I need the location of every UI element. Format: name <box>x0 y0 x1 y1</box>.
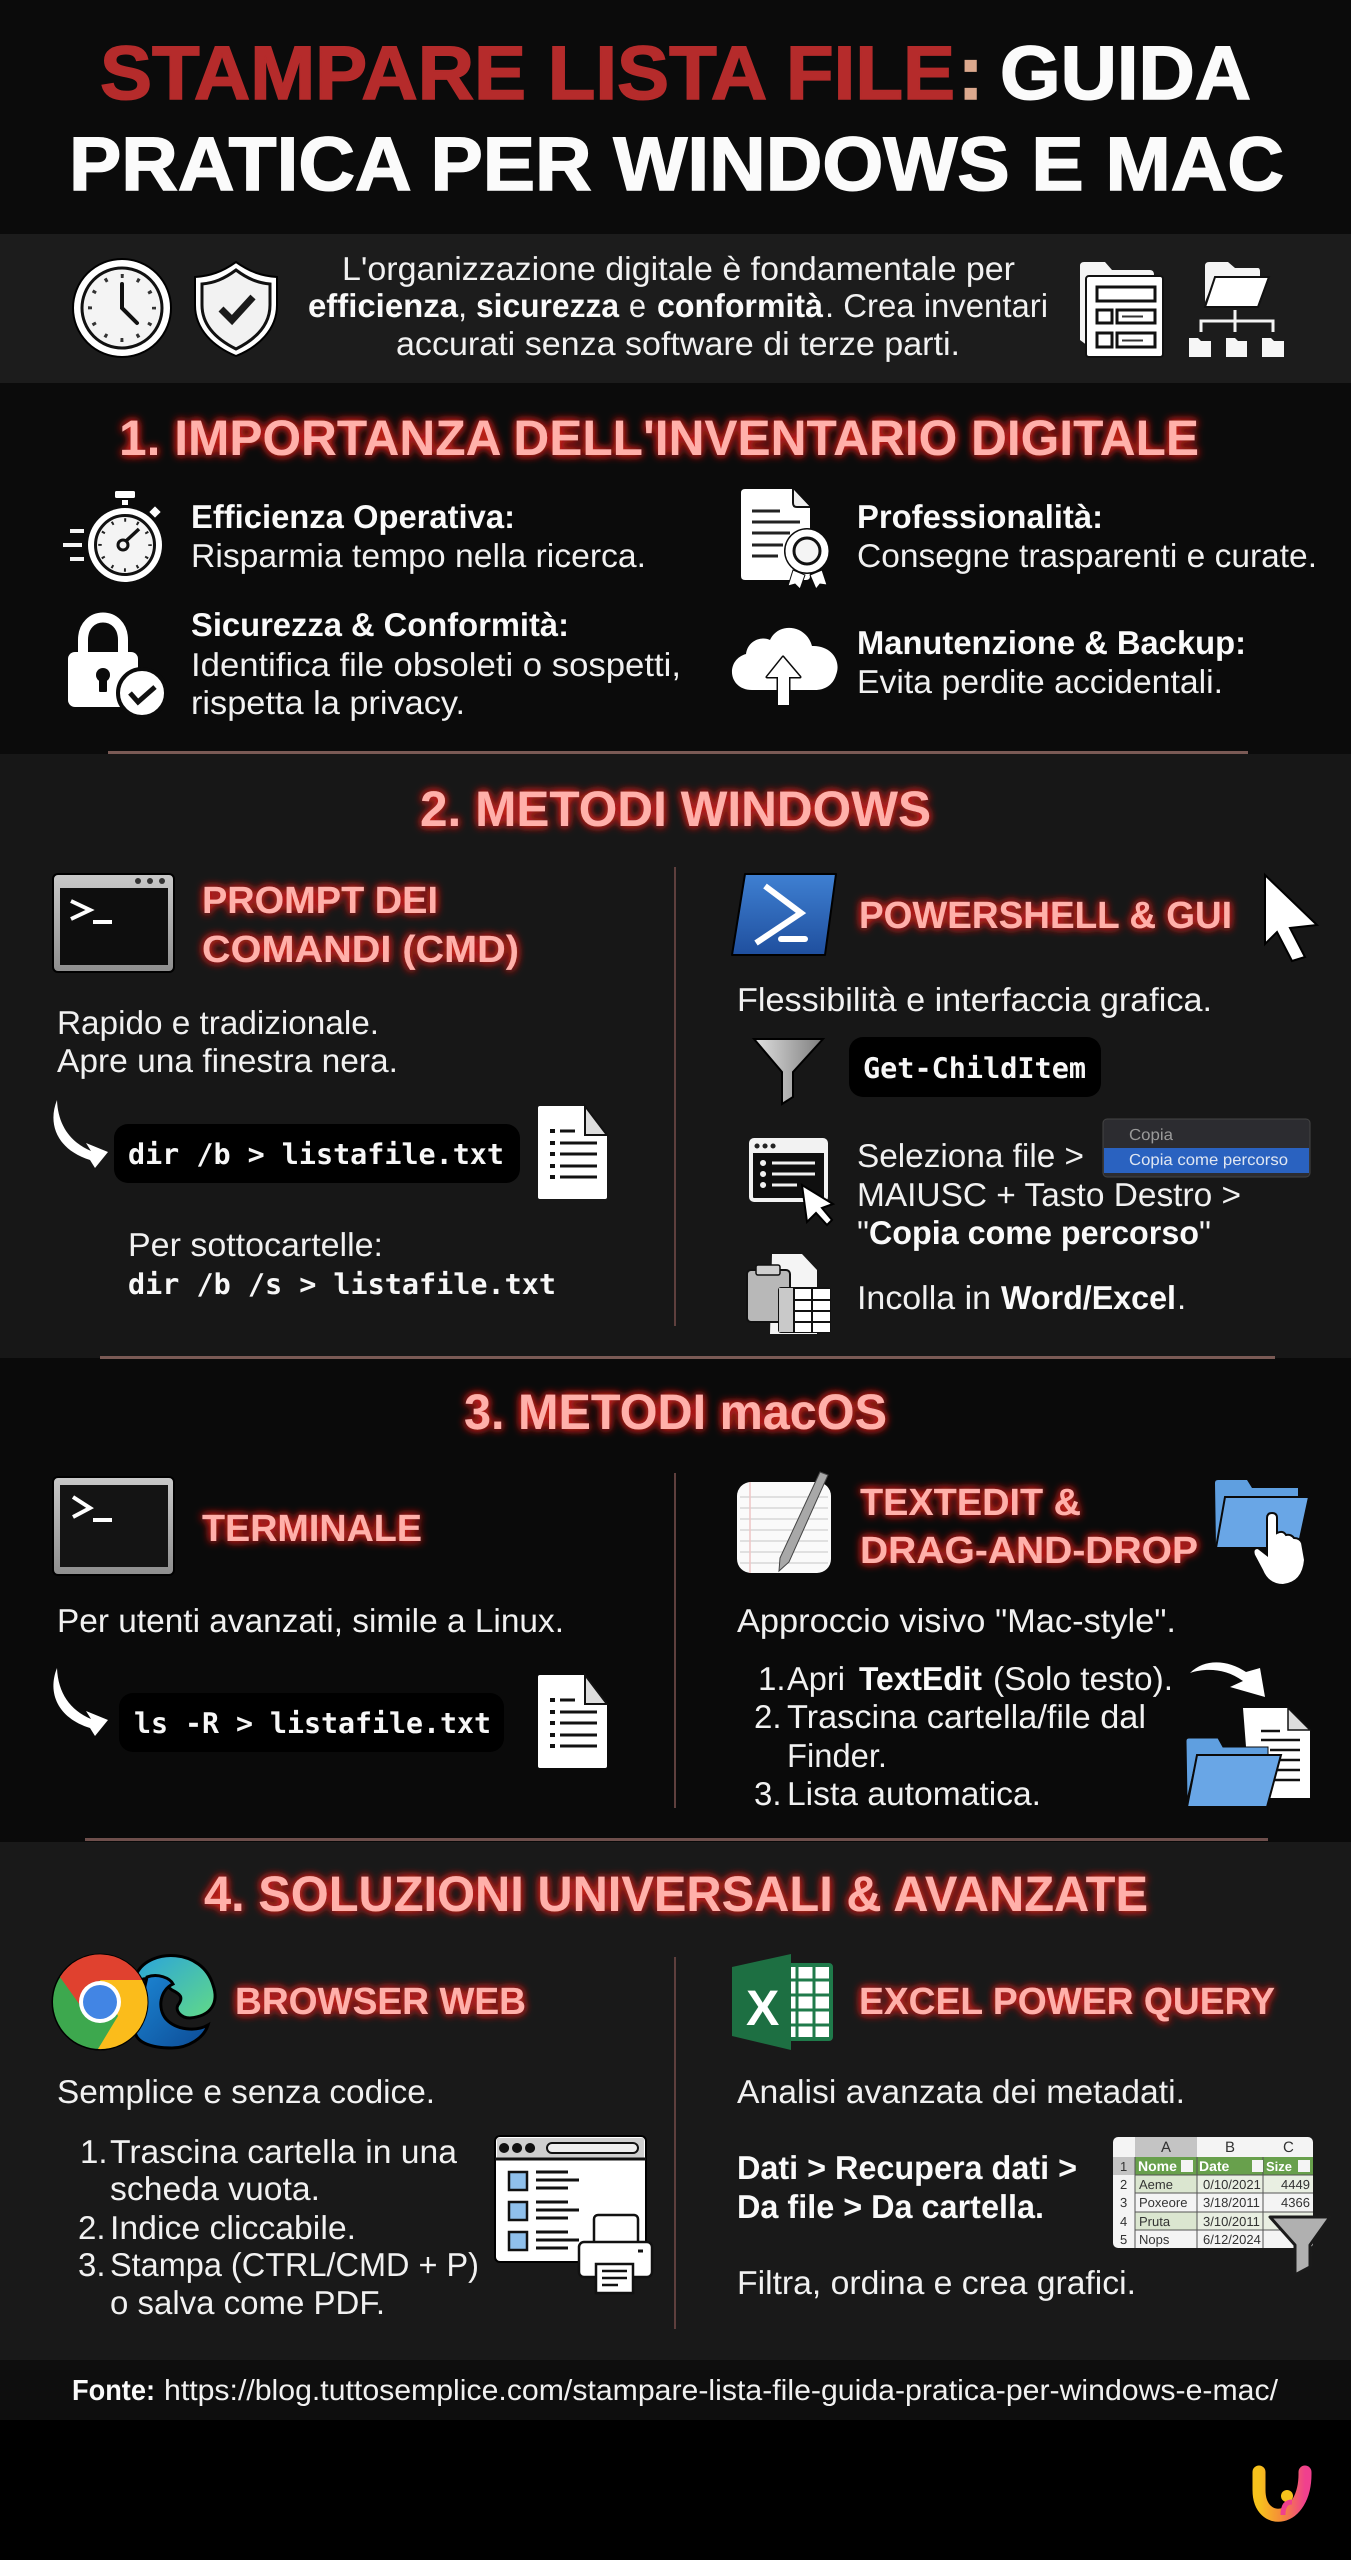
panel: footer source: https://blog.tuttosemplice.com/stampare-lista-file-guida-pratica-per-windows-e-mac/ <box>164 2375 1279 2407</box>
item: sicurezza e conformita: Sicurezza & Conformità: <box>191 606 569 643</box>
column: powershell and gui <box>732 874 1317 1334</box>
intro text: . Crea inventari <box>825 287 1048 324</box>
spreadsheet: A <box>1161 2139 1171 2156</box>
spreadsheet: 5 <box>1120 2232 1127 2247</box>
icon: text document <box>538 1675 607 1768</box>
title: PRATICA PER WINDOWS E MAC <box>69 122 1284 207</box>
subfolder command <box>128 1226 556 1301</box>
code block: get-childitem <box>849 1037 1101 1097</box>
paste instruction <box>857 1279 1186 1316</box>
numbered steps: Finder. <box>787 1737 887 1774</box>
item: professionalita: Professionalità: <box>857 498 1103 535</box>
column: textedit and drag-and-drop <box>737 1472 1310 1812</box>
code block: ls: ls -R > listafile.txt <box>134 1707 491 1740</box>
spreadsheet: Pruta <box>1139 2214 1171 2229</box>
icon: certificate document <box>741 489 830 589</box>
spreadsheet: Date <box>1199 2158 1230 2174</box>
icon: terminal <box>53 1477 174 1575</box>
icon: mouse cursor <box>1265 875 1317 961</box>
spreadsheet: 2 <box>1120 2177 1127 2192</box>
numbered steps: 1. <box>758 1660 786 1697</box>
item: manutenzione e backup <box>732 624 1246 705</box>
subheading: browser web: BROWSER WEB <box>235 1981 526 2023</box>
intro text: e <box>629 287 646 324</box>
icon: folder with hand <box>1215 1480 1309 1585</box>
numbered steps: 2. <box>78 2209 106 2246</box>
subheading: prompt dei comandi <box>202 880 519 971</box>
numbered steps: Apri <box>787 1660 845 1697</box>
spreadsheet: C <box>1283 2139 1294 2156</box>
panel: section 1 importance <box>0 383 1351 754</box>
icon: clipboard with table <box>747 1254 831 1334</box>
context menu <box>1103 1119 1310 1177</box>
subheading: prompt dei comandi: COMANDI (CMD) <box>202 929 519 971</box>
spreadsheet: 0/10/2021 <box>1203 2177 1261 2192</box>
subheading: textedit and drag-and-drop <box>860 1482 1198 1572</box>
panel: section 3 macos <box>0 1356 1351 1842</box>
item: efficienza operativa: Efficienza Operativa: <box>191 498 515 535</box>
description <box>57 1004 398 1079</box>
subheading: terminale: TERMINALE <box>202 1508 422 1550</box>
logo <box>1259 2472 1305 2515</box>
icon: folder with form <box>1080 262 1163 357</box>
arrow <box>53 1668 108 1736</box>
description: Per utenti avanzati, simile a Linux. <box>57 1602 564 1639</box>
item: professionalita <box>741 489 1317 589</box>
icon: excel: X <box>746 1980 779 2036</box>
arrow <box>53 1100 108 1168</box>
instructions: " <box>857 1214 869 1251</box>
spreadsheet: 6/12/2024 <box>1203 2232 1261 2247</box>
heading: section 2: 2. METODI WINDOWS <box>420 781 931 837</box>
intro text: , <box>458 287 467 324</box>
icon: lock with check <box>68 618 166 717</box>
icon: document with folder <box>1186 1708 1310 1807</box>
icon: stopwatch <box>63 491 162 582</box>
instructions: Copia come percorso <box>869 1214 1199 1251</box>
numbered steps: 3. <box>754 1775 782 1812</box>
icon: cmd window <box>53 874 174 972</box>
subheading: powershell: POWERSHELL & GUI <box>859 895 1232 937</box>
navigation path: Dati > Recupera dati > <box>737 2149 1077 2186</box>
spreadsheet: 3/10/2011 <box>1203 2214 1260 2229</box>
heading: section 3: 3. METODI macOS <box>464 1384 887 1440</box>
instructions <box>857 1137 1241 1251</box>
instructions: Seleziona file > <box>857 1137 1084 1174</box>
numbered steps: o salva come PDF. <box>110 2284 385 2321</box>
column: prompt dei comandi <box>53 874 607 1301</box>
description: Apre una finestra nera. <box>57 1042 398 1079</box>
item: efficienza operativa: Risparmia tempo nella ricerca. <box>191 537 646 574</box>
spreadsheet: Nops <box>1139 2232 1170 2247</box>
intro text <box>308 250 1048 362</box>
panel: intro band <box>0 234 1351 383</box>
numbered steps <box>754 1660 1173 1812</box>
spreadsheet: Size <box>1266 2159 1292 2174</box>
title: STAMPARE LISTA FILE <box>100 31 955 116</box>
icon: excel <box>732 1954 831 2050</box>
title: : <box>958 31 983 116</box>
spreadsheet <box>1113 2137 1330 2275</box>
icon: textedit <box>737 1472 831 1573</box>
heading: section 1: 1. IMPORTANZA DELL'INVENTARIO DIGITALE <box>119 410 1199 466</box>
subheading: textedit and drag-and-drop: DRAG-AND-DROP <box>860 1530 1198 1572</box>
intro text: accurati senza software di terze parti. <box>396 325 960 362</box>
column: browser web <box>52 1954 652 2321</box>
description: Semplice e senza codice. <box>57 2073 435 2110</box>
panel: section 2 windows <box>0 751 1351 1358</box>
spreadsheet: 4 <box>1120 2214 1127 2229</box>
paste instruction: . <box>1177 1279 1186 1316</box>
numbered steps: TextEdit <box>859 1660 982 1697</box>
icon: cloud upload <box>732 628 838 705</box>
column: excel power query <box>732 1954 1330 2301</box>
navigation path <box>737 2149 1077 2225</box>
subheading: textedit and drag-and-drop: TEXTEDIT & <box>860 1482 1081 1524</box>
subheading: excel power query: EXCEL POWER QUERY <box>859 1981 1275 2023</box>
spreadsheet: 3/18/2011 <box>1203 2195 1260 2210</box>
numbered steps: Trascina cartella/file dal <box>787 1698 1146 1735</box>
arrow: curved <box>1190 1662 1265 1697</box>
icon: edge <box>135 1956 215 2048</box>
panel: footer source: Fonte: <box>72 2375 155 2407</box>
numbered steps: Stampa (CTRL/CMD + P) <box>110 2246 479 2283</box>
spreadsheet: Poxeore <box>1139 2195 1187 2210</box>
description: Rapido e tradizionale. <box>57 1004 379 1041</box>
item: manutenzione e backup: Manutenzione & Backup: <box>857 624 1246 661</box>
spreadsheet: 4449 <box>1281 2177 1310 2192</box>
intro text: efficienza <box>308 287 459 324</box>
numbered steps: 3. <box>78 2246 106 2283</box>
item: sicurezza e conformita <box>68 606 681 721</box>
intro text: conformità <box>657 287 824 324</box>
panel: footer source <box>0 2360 1351 2420</box>
icon: powershell <box>732 874 836 955</box>
item: sicurezza e conformita: rispetta la privacy. <box>191 684 465 721</box>
navigation path: Da file > Da cartella. <box>737 2188 1044 2225</box>
instructions: MAIUSC + Tasto Destro > <box>857 1176 1241 1213</box>
subheading: prompt dei comandi: PROMPT DEI <box>202 880 438 922</box>
numbered steps <box>78 2133 479 2321</box>
item: efficienza operativa <box>63 491 646 582</box>
context menu: Copia come percorso <box>1129 1152 1288 1169</box>
code block: ls <box>119 1693 504 1752</box>
description: Approccio visivo "Mac-style". <box>737 1602 1176 1639</box>
item: sicurezza e conformita: Identifica file obsoleti o sospetti, <box>191 646 681 683</box>
numbered steps: (Solo testo). <box>993 1660 1173 1697</box>
spreadsheet: 1 <box>1120 2159 1127 2174</box>
numbered steps: Trascina cartella in una <box>110 2133 458 2170</box>
numbered steps: Lista automatica. <box>787 1775 1041 1812</box>
icon: clock <box>73 259 171 357</box>
panel: header <box>0 0 1351 234</box>
subfolder command: Per sottocartelle: <box>128 1226 383 1263</box>
numbered steps: 1. <box>80 2133 108 2170</box>
paste instruction: Incolla in <box>857 1279 991 1316</box>
title <box>69 31 1284 207</box>
icon: text document <box>538 1106 607 1199</box>
heading: section 4: 4. SOLUZIONI UNIVERSALI & AVANZATE <box>204 1866 1148 1922</box>
item: manutenzione e backup: Evita perdite accidentali. <box>857 663 1223 700</box>
icon: filter funnel <box>1270 2217 1330 2275</box>
icon: shield <box>195 262 277 356</box>
instructions: " <box>1199 1214 1211 1251</box>
column: terminale <box>53 1477 607 1768</box>
description: Analisi avanzata dei metadati. <box>737 2073 1185 2110</box>
icon: folder tree <box>1189 262 1284 357</box>
icon: window with cursor <box>751 1140 833 1225</box>
spreadsheet: Nome <box>1138 2158 1177 2174</box>
intro text: sicurezza <box>476 287 620 324</box>
panel: section 4 universal solutions <box>0 1838 1351 2360</box>
spreadsheet: Aeme <box>1139 2177 1173 2192</box>
closing note: Filtra, ordina e crea grafici. <box>737 2264 1136 2301</box>
code block: dir <box>114 1124 520 1183</box>
numbered steps: Indice cliccabile. <box>110 2209 356 2246</box>
paste instruction: Word/Excel <box>1001 1279 1176 1316</box>
item: professionalita: Consegne trasparenti e curate. <box>857 537 1317 574</box>
spreadsheet: B <box>1225 2139 1235 2156</box>
numbered steps: scheda vuota. <box>110 2170 320 2207</box>
description: Flessibilità e interfaccia grafica. <box>737 981 1212 1018</box>
code block: dir: dir /b > listafile.txt <box>128 1138 504 1171</box>
context menu: Copia <box>1129 1127 1173 1144</box>
subfolder command: dir /b /s > listafile.txt <box>128 1268 556 1301</box>
icon: chrome <box>52 1954 148 2050</box>
title: GUIDA <box>1000 31 1251 116</box>
icon: browser window with printer <box>495 2136 652 2293</box>
spreadsheet: 3 <box>1120 2195 1127 2210</box>
icon: funnel <box>754 1039 823 1104</box>
intro text: L'organizzazione digitale è fondamentale per <box>342 250 1015 287</box>
spreadsheet: 4366 <box>1281 2195 1310 2210</box>
numbered steps: 2. <box>754 1698 782 1735</box>
code block: get-childitem: Get-ChildItem <box>863 1052 1086 1085</box>
